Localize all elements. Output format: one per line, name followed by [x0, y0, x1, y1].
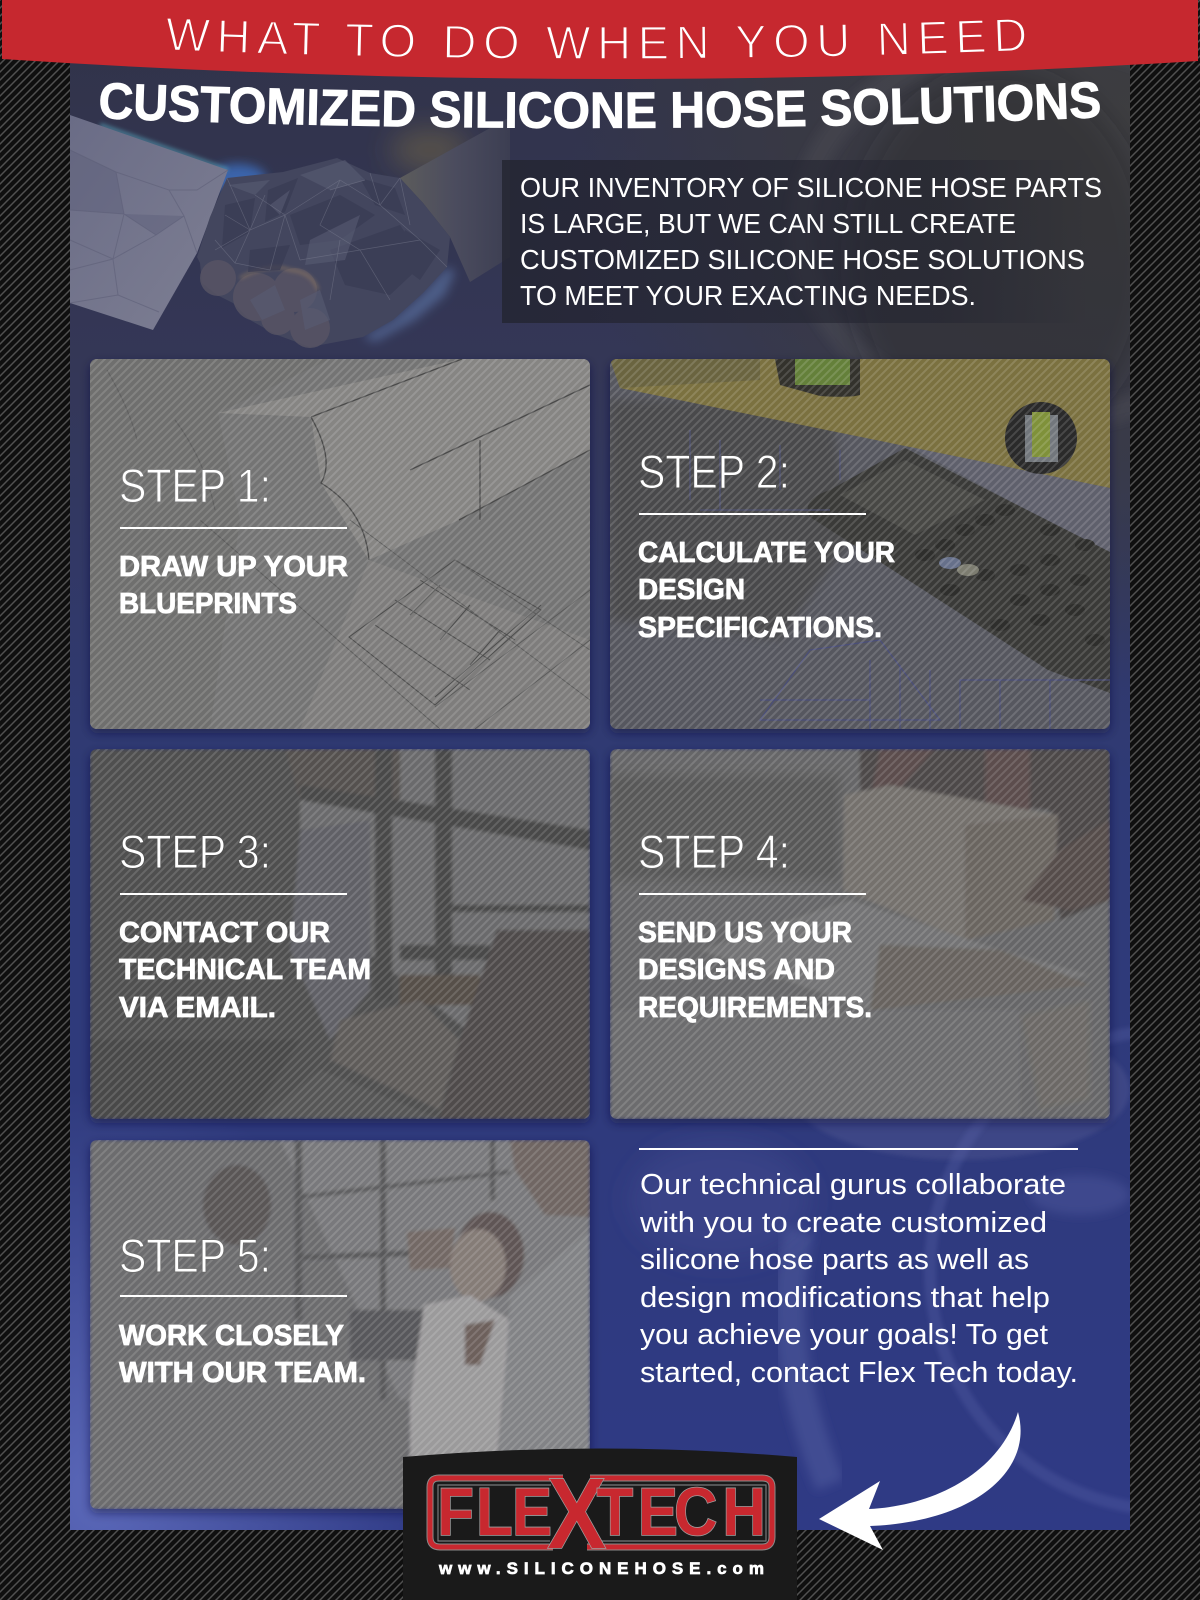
logo frame: [430, 1478, 772, 1547]
panel: step 5: [90, 1140, 590, 1513]
step description: DRAW UP YOUR: [119, 551, 348, 583]
step label: STEP 4:: [638, 825, 790, 878]
closing text block: design modifications that help: [640, 1282, 1050, 1314]
intro text block: [502, 160, 1102, 323]
step description: REQUIREMENTS.: [638, 992, 872, 1024]
fingers: [200, 260, 330, 348]
step description: SEND US YOUR: [638, 917, 852, 949]
step description: TECHNICAL TEAM: [119, 954, 371, 986]
hand mesh lines: [215, 173, 447, 300]
step description: CONTACT OUR: [119, 917, 330, 949]
image: low-poly handshake: [70, 115, 510, 348]
panel: step 1: [90, 359, 590, 733]
step description: WITH OUR TEAM.: [119, 1357, 366, 1389]
heading: what to do: WHAT TO DO WHEN YOU NEED: [168, 18, 1024, 58]
closing text block: started, contact Flex Tech today.: [640, 1357, 1078, 1389]
panel: step 2: [610, 359, 1110, 733]
intro text block: IS LARGE, BUT WE CAN STILL CREATE: [520, 208, 1016, 239]
panel: step 4: [610, 749, 1110, 1123]
intro text block: CUSTOMIZED SILICONE HOSE SOLUTIONS: [520, 244, 1085, 275]
left cuff: [70, 115, 228, 330]
step description: DESIGN: [638, 574, 745, 606]
panel: step 3: [90, 749, 590, 1123]
step description: DESIGNS AND: [638, 954, 835, 986]
right cuff: [400, 117, 510, 282]
step description: CALCULATE YOUR: [638, 537, 895, 569]
logo wordmark: FLE: [437, 1473, 552, 1550]
intro text block: OUR INVENTORY OF SILICONE HOSE PARTS: [520, 172, 1102, 203]
closing text block: silicone hose parts as well as: [640, 1244, 1029, 1276]
left cuff mesh: [70, 150, 228, 312]
logo wordmark: X: [547, 1458, 606, 1569]
step label: STEP 2:: [638, 445, 790, 498]
logo wordmark: TECH: [597, 1473, 766, 1550]
clasped hands: [197, 158, 450, 347]
step description: WORK CLOSELY: [119, 1320, 344, 1352]
step description: SPECIFICATIONS.: [638, 612, 882, 644]
hand blue rim: [363, 267, 455, 342]
logo plate: [403, 1448, 797, 1600]
hand facets: [222, 178, 440, 295]
step label: STEP 1:: [119, 459, 271, 512]
closing text block: [639, 1148, 1078, 1389]
closing text block: Our technical gurus collaborate: [640, 1169, 1066, 1201]
step label: STEP 5:: [119, 1229, 271, 1282]
step label: STEP 3:: [119, 825, 271, 878]
logo url: www.SILICONEHOSE.com: [438, 1559, 764, 1578]
banner: red top ribbon: [2, 0, 1198, 79]
step description: VIA EMAIL.: [119, 992, 276, 1024]
heading: customized silicone hose solutions: CUSTOMIZED SILICONE HOSE SOLUTIONS: [100, 82, 1100, 129]
intro text block: TO MEET YOUR EXACTING NEEDS.: [520, 280, 976, 311]
arrow pointing to logo: [819, 1412, 1021, 1550]
closing text block: you achieve your goals! To get: [640, 1319, 1048, 1351]
closing text block: with you to create customized: [639, 1207, 1047, 1239]
step description: BLUEPRINTS: [119, 588, 297, 620]
